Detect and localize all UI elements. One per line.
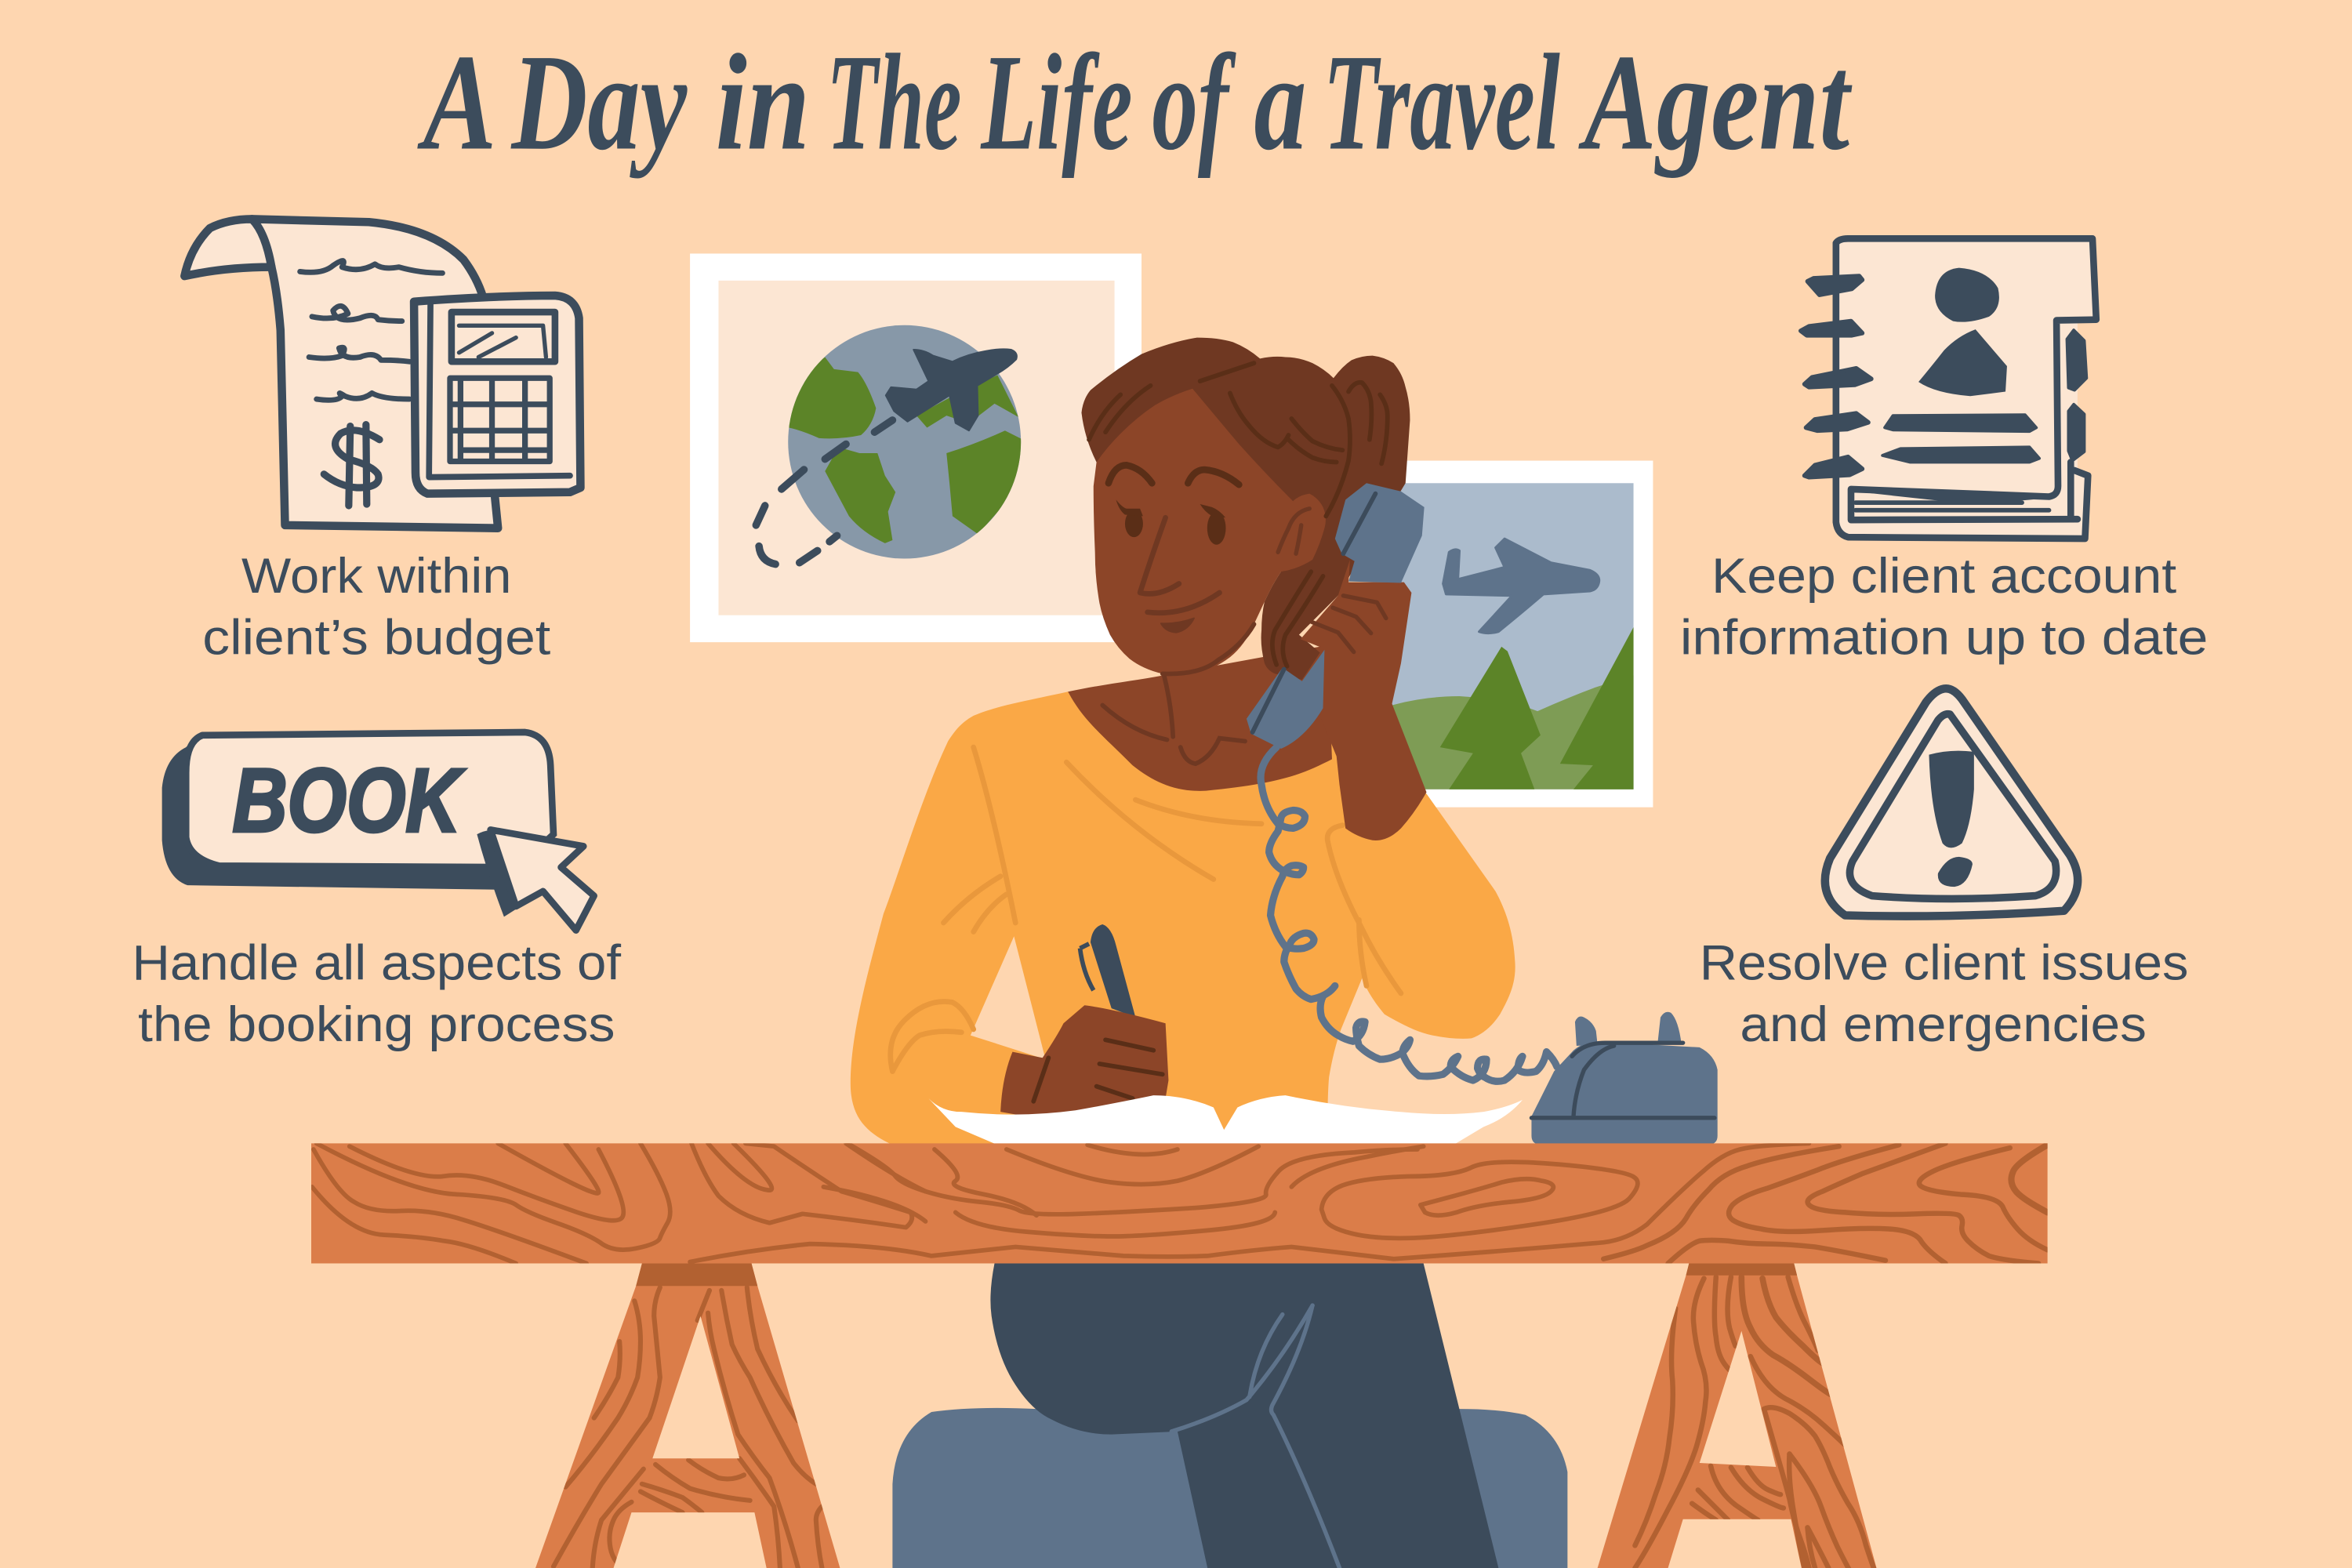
button shadow <box>162 735 510 890</box>
trouser folds <box>1171 1305 1340 1568</box>
receipt curl <box>184 219 271 276</box>
open notebook <box>928 1095 1523 1145</box>
text: keep client account information up to date: information up to date <box>1680 610 2208 665</box>
title: in <box>716 26 810 179</box>
title: a <box>1254 26 1306 179</box>
sweater <box>851 691 1515 1145</box>
calculator body <box>414 296 580 494</box>
cursor arrow <box>491 829 594 931</box>
plane <box>886 349 1017 430</box>
telephone handset <box>1247 483 1425 749</box>
index tabs <box>2067 330 2086 461</box>
eyes <box>1116 499 1226 545</box>
continents <box>787 358 1023 543</box>
title: Travel <box>1323 26 1560 179</box>
poster: plane over hills <box>1388 461 1653 808</box>
book outline <box>1836 238 2096 539</box>
icon: receipt and calculator <box>184 219 580 528</box>
dashed flight path <box>756 420 892 564</box>
hair <box>1081 338 1410 680</box>
cursor shadow <box>477 830 521 916</box>
poster: globe and plane <box>690 253 1142 642</box>
sweater folds <box>891 747 1401 1072</box>
book label: BOOK <box>233 750 465 851</box>
phone cradle prongs <box>1575 1012 1682 1046</box>
poster frame <box>690 253 1142 642</box>
text: handle all aspects of the booking process: Handle all aspects of <box>132 936 622 991</box>
person <box>851 338 1523 1568</box>
title: Day <box>510 26 688 179</box>
spiral rings <box>1801 276 1871 477</box>
poster paper <box>718 281 1115 615</box>
text: resolve client issues and emergencies <box>1700 936 2188 1052</box>
mouthpiece <box>1247 650 1324 749</box>
neck and chest <box>1068 645 1332 791</box>
hand finger lines <box>1312 596 1386 652</box>
hair strands <box>1089 363 1388 666</box>
poster trees <box>1440 627 1634 789</box>
face <box>1094 389 1326 674</box>
title: Life <box>980 26 1133 179</box>
icon: book button with cursor <box>162 732 594 931</box>
gap between arm and body <box>971 936 1046 1059</box>
dollar sign <box>324 425 379 506</box>
neck lines <box>1102 675 1245 764</box>
writing hand lines <box>1033 1040 1163 1102</box>
trousers <box>990 1263 1498 1568</box>
telephone cord <box>1261 747 1557 1081</box>
button face <box>186 732 554 867</box>
phone body <box>1531 1041 1718 1145</box>
icon: warning triangle <box>1825 688 2078 916</box>
poster sky <box>1392 483 1634 789</box>
book fill <box>1836 238 2096 537</box>
text: keep client account information up to date: Keep client account <box>1711 549 2177 604</box>
icon: contact address book <box>1801 238 2096 539</box>
earpiece <box>1335 483 1425 583</box>
contact text lines <box>1882 415 2039 462</box>
chair <box>892 1408 1567 1568</box>
pen <box>1080 924 1135 1018</box>
text: resolve client issues and emergencies: and emergencies <box>1740 997 2147 1052</box>
wood grain <box>312 1143 2048 1263</box>
poster frame <box>1388 461 1653 808</box>
text: keep client account information up to date <box>1680 549 2208 665</box>
desk top <box>311 1143 2048 1263</box>
ear lines <box>1278 509 1309 554</box>
text: resolve client issues and emergencies: Resolve client issues <box>1700 936 2188 991</box>
left desk leg <box>535 1263 840 1568</box>
title: A <box>417 26 496 179</box>
page lines <box>1856 503 2049 510</box>
title: The <box>826 26 961 179</box>
receipt paper <box>252 219 498 528</box>
title: of <box>1152 26 1236 179</box>
poster hill <box>1392 675 1634 789</box>
title <box>417 26 1853 179</box>
inner triangle <box>1849 714 2056 898</box>
exclamation mark <box>1929 751 1974 887</box>
title: Agent <box>1578 26 1853 179</box>
globe <box>788 325 1021 559</box>
calculator screen <box>452 312 555 361</box>
phone lines <box>1531 1043 1715 1118</box>
forearm and hand at phone <box>1301 560 1427 840</box>
writing hand <box>1000 1005 1168 1118</box>
calculator keypad <box>450 378 550 462</box>
text: work within client's budget: Work within <box>241 549 511 604</box>
right desk leg <box>1598 1263 1876 1568</box>
poster plane <box>1443 539 1599 633</box>
text: handle all aspects of the booking process <box>132 936 622 1052</box>
text: work within client's budget: client’s budget <box>202 610 551 665</box>
text: work within client's budget <box>202 549 551 665</box>
eyebrows <box>1109 465 1239 485</box>
receipt scribbles <box>300 261 442 400</box>
text: handle all aspects of the booking process: the booking process <box>138 997 615 1052</box>
outer triangle <box>1825 688 2078 916</box>
telephone base <box>1531 1012 1718 1145</box>
contact portrait <box>1918 268 2007 396</box>
nose and mouth <box>1140 517 1254 674</box>
